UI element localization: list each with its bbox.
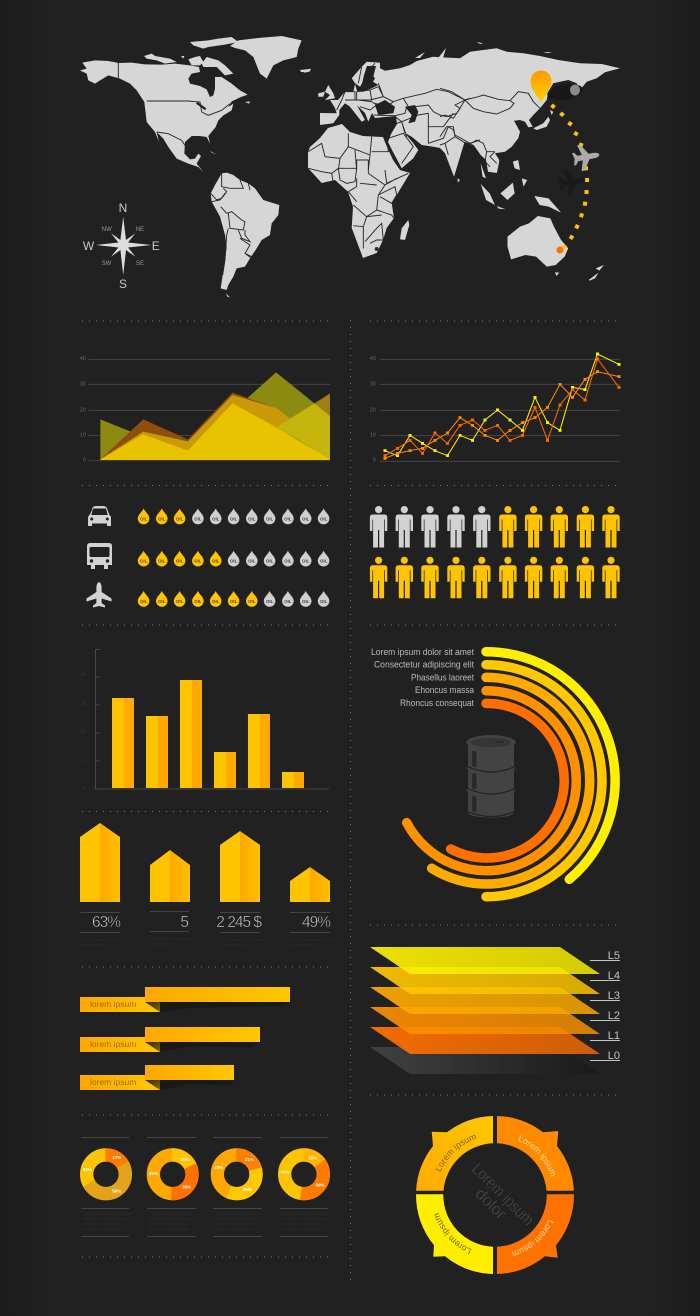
donut 1: Phasellus laoreet massa: [83, 1222, 121, 1226]
stacked layers: [370, 947, 600, 1074]
oil drops row: bus: OIL: [266, 559, 274, 564]
donut 3: Phasellus laoreet massa: [215, 1222, 253, 1226]
layer labels: L5: [608, 950, 620, 962]
people pictogram row 1: [370, 506, 620, 548]
donut 4: [280, 1138, 330, 1236]
radial bars: [407, 652, 615, 897]
compass rose: S: [119, 277, 127, 291]
oil drops row: airplane: OIL: [140, 599, 148, 604]
area chart: 40: [80, 356, 86, 362]
compass rose: E: [152, 239, 160, 253]
bar chart: 20: [80, 729, 86, 735]
dark shadow over Kamchatka: [546, 81, 584, 103]
oil drops row: bus: OIL: [320, 559, 328, 564]
line chart: [370, 354, 620, 464]
layer labels: L1: [608, 1030, 620, 1042]
oil drops row: airplane: OIL: [266, 599, 274, 604]
house stat: 5: Lorem ipsum dolor sit amet: [151, 937, 193, 941]
oil drops row: car: OIL: [284, 516, 292, 521]
oil drops row: bus: [138, 551, 329, 566]
oil drops row: airplane: OIL: [284, 599, 292, 604]
ribbon bar 2: lorem ipsum: [90, 1039, 136, 1049]
donut 1: [81, 1138, 131, 1236]
oil drops row: car: OIL: [230, 516, 238, 521]
donut 3: Lorem ipsum dolor sit amet elit: [215, 1212, 263, 1216]
oil drops row: car: OIL: [212, 516, 220, 521]
ribbon bar 2: [80, 1027, 260, 1052]
oil drops row: airplane: OIL: [194, 599, 202, 604]
oil drops row: bus: OIL: [212, 559, 220, 564]
area chart: [80, 356, 330, 464]
donut 2: Rhoncus consequat dolor: [149, 1227, 190, 1231]
house stat: 63%: consectetur elit: [81, 943, 105, 947]
house stat: 63%: Lorem ipsum dolor sit amet: [81, 938, 123, 942]
icon: airplane: [86, 582, 112, 608]
layer labels: L3: [608, 990, 620, 1002]
donut 4: 15%: [308, 1156, 317, 1160]
bar chart: 30: [80, 701, 86, 707]
house stat: 49%: 49%: [302, 914, 331, 931]
radial bar labels: Phasellus laoreet: [411, 672, 475, 682]
donut 4: Rhoncus consequat dolor: [282, 1227, 323, 1231]
oil drops row: bus: OIL: [302, 559, 310, 564]
donut 1: 50%: [112, 1188, 121, 1193]
house stat: 5: 5: [180, 914, 189, 931]
south east asia, australia and pacific: [457, 160, 604, 281]
oil drops row: bus: OIL: [140, 559, 148, 564]
eurasia: [300, 42, 620, 177]
donut 3: [213, 1138, 263, 1236]
bar chart: 10: [80, 759, 86, 765]
donut 2: Consectetur adipiscing ipsum: [149, 1217, 195, 1221]
radial bar labels: Consectetur adipiscing elit: [374, 660, 475, 670]
ring segment: bottom right: Lorem ipsum: [512, 1220, 554, 1256]
donut 1: Rhoncus consequat dolor: [83, 1227, 124, 1231]
layer labels: L4: [608, 970, 620, 982]
ribbon bar 1: lorem ipsum: [90, 999, 136, 1009]
oil drops row: airplane: OIL: [212, 599, 220, 604]
area chart: 30: [80, 382, 86, 388]
oil drops row: airplane: [138, 591, 329, 607]
donut 3: Consectetur adipiscing ipsum: [215, 1217, 261, 1221]
oil drops row: airplane: OIL: [158, 599, 166, 604]
donut 1: Lorem ipsum dolor sit amet elit: [83, 1212, 131, 1216]
compass rose: SW: [102, 261, 112, 267]
oil drops row: airplane: OIL: [248, 599, 256, 604]
ring center text: Lorem ipsum: [468, 1159, 538, 1229]
oil drops row: airplane: OIL: [230, 599, 238, 604]
donut 1: 17%: [112, 1155, 121, 1160]
house stat: 63%: 63%: [92, 914, 121, 931]
donut 2: [147, 1138, 197, 1236]
ribbon bar 1: [80, 987, 290, 1012]
oil drops row: car: [138, 508, 329, 524]
ring segment: top left: Lorem ipsum: [435, 1134, 476, 1172]
donut 4: Phasellus laoreet massa: [282, 1222, 320, 1226]
ring segment: bottom right: [497, 1194, 574, 1274]
house stat: 5: consectetur elit: [151, 942, 175, 946]
bar chart: 40: [80, 672, 86, 678]
icon: car: [88, 506, 111, 526]
oil drops row: bus: OIL: [284, 559, 292, 564]
line chart: 30: [370, 382, 376, 388]
ring segment: top right: Lorem ipsum: [518, 1135, 556, 1176]
plane shadow: [557, 167, 588, 197]
oil drops row: car: OIL: [320, 516, 328, 521]
donut 2: 35%: [182, 1184, 191, 1190]
ring center text: dolor: [471, 1184, 511, 1224]
donut 3: 21%: [245, 1157, 254, 1162]
oil drops row: bus: OIL: [248, 559, 256, 564]
line chart: 20: [370, 408, 376, 414]
plane on route: [571, 142, 602, 172]
layer labels: L0: [608, 1050, 620, 1062]
layer labels: L2: [608, 1010, 620, 1022]
house stat: 2245$: Lorem ipsum dolor sit amet: [221, 938, 263, 942]
house stat: 5: [150, 850, 193, 946]
oil drops row: bus: OIL: [230, 559, 238, 564]
oil drops row: bus: OIL: [194, 559, 202, 564]
radial bar labels: [371, 647, 475, 708]
house stat: 63%: [80, 823, 123, 947]
oil drops row: car: OIL: [176, 516, 184, 521]
compass rose: NW: [102, 227, 112, 233]
area chart: 20: [80, 408, 86, 414]
area chart: 10: [80, 433, 86, 439]
line chart: 0: [373, 458, 376, 464]
compass rose: SE: [136, 261, 144, 267]
donut 2: Lorem ipsum dolor sit amet elit: [149, 1212, 197, 1216]
oil drops row: airplane: OIL: [302, 599, 310, 604]
compass rose: [83, 201, 160, 291]
donut 3: 36%: [243, 1187, 252, 1192]
bar chart: [80, 650, 329, 792]
donut 4: 46%: [280, 1170, 290, 1174]
radial bar labels: Rhoncus consequat: [400, 698, 475, 708]
destination dot: [556, 246, 564, 254]
ring segment: top right: [497, 1116, 574, 1191]
donut 2: 20%: [180, 1157, 190, 1162]
south america: [211, 173, 279, 297]
oil drops row: car: OIL: [248, 516, 256, 521]
compass rose: N: [119, 201, 127, 215]
oil drops row: bus: OIL: [158, 559, 166, 564]
radial bar labels: Lorem ipsum dolor sit amet: [371, 647, 475, 657]
oil drops row: bus: OIL: [176, 559, 184, 564]
ring segment: bottom left: Lorem ipsum: [434, 1212, 472, 1254]
icon: oil barrel: [466, 735, 516, 818]
donut 2: 45%: [149, 1171, 158, 1176]
oil drops row: car: OIL: [194, 516, 202, 521]
house stat: 2245$: [216, 831, 263, 947]
donut 1: Consectetur adipiscing ipsum: [83, 1217, 129, 1221]
oil drops row: car: OIL: [302, 516, 310, 521]
layer labels: [590, 950, 620, 1062]
compass rose: NE: [136, 227, 144, 233]
oil drops row: airplane: OIL: [320, 599, 328, 604]
line chart: 10: [370, 433, 376, 439]
donut 3: 43%: [214, 1165, 223, 1170]
radial bar labels: Ehoncus massa: [415, 685, 474, 695]
ribbon bar 3: [80, 1065, 234, 1090]
oil drops row: airplane: OIL: [176, 599, 184, 604]
people pictogram row 2: [370, 557, 620, 598]
donut 4: 39%: [315, 1182, 325, 1188]
ring segment: top left: [416, 1116, 493, 1191]
oil drops row: car: OIL: [158, 516, 166, 521]
map pin: [530, 70, 552, 103]
house stat: 49%: [290, 867, 333, 947]
donut 4: Consectetur adipiscing ipsum: [282, 1217, 328, 1221]
donut 1: 33%: [83, 1167, 92, 1172]
bar chart: 0: [83, 786, 86, 792]
area chart: 0: [83, 458, 86, 464]
oil drops row: car: OIL: [140, 516, 148, 521]
ring segment: bottom left: [416, 1194, 493, 1274]
house stat: 49%: consectetur elit: [291, 943, 315, 947]
dotted flight route: [550, 103, 589, 250]
house stat: 2245$: consectetur elit: [221, 943, 245, 947]
ribbon bar 3: lorem ipsum: [90, 1077, 136, 1087]
oil drops row: car: OIL: [266, 516, 274, 521]
world map: [80, 36, 620, 297]
compass rose: W: [83, 239, 95, 253]
line chart: 40: [370, 356, 376, 362]
house stat: 2245$: 2 245 $: [216, 914, 262, 931]
donut 2: Phasellus laoreet massa: [149, 1222, 187, 1226]
house stat: 49%: Lorem ipsum dolor sit amet: [291, 938, 333, 942]
donut 3: Rhoncus consequat dolor: [215, 1227, 256, 1231]
donut 4: Lorem ipsum dolor sit amet elit: [282, 1212, 330, 1216]
africa: [308, 124, 410, 258]
north america and greenland: [80, 36, 311, 177]
icon: bus: [87, 543, 112, 569]
